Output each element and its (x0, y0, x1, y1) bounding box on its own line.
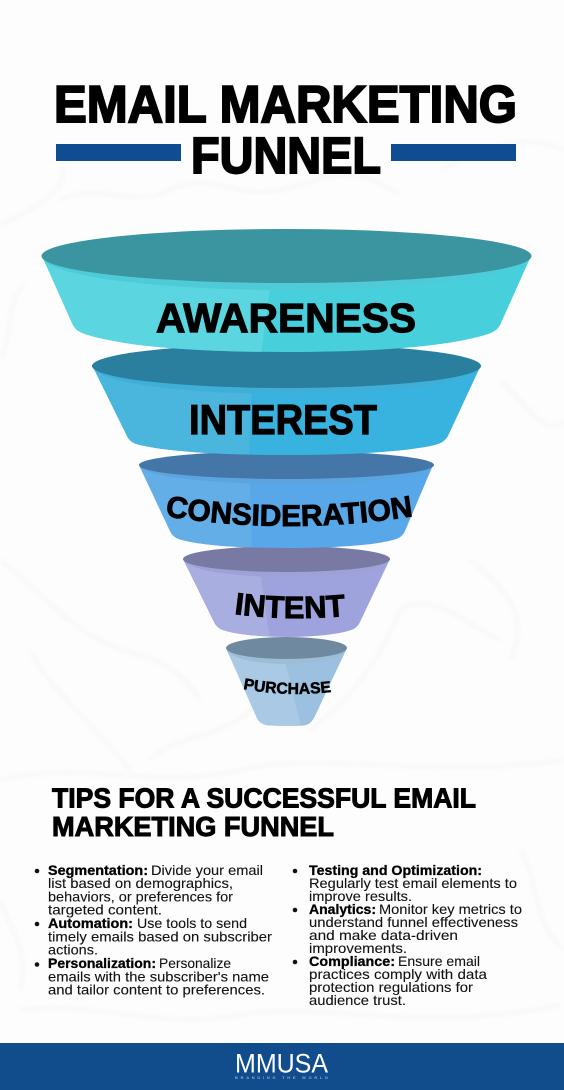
footer logo: BRANDING THE WORLD (235, 1075, 328, 1080)
tip: segmentation: Segmentation: (48, 862, 148, 878)
tip: segmentation: list based on demographics, (48, 875, 233, 891)
title: FUNNEL (191, 127, 381, 184)
tip: analytics: improvements. (309, 940, 407, 956)
funnel tier: intent: INTENT (236, 592, 345, 619)
tip: segmentation: targeted content. (48, 902, 162, 918)
tip: analytics: understand funnel effectiveness (309, 914, 518, 930)
tip: testing and optimization (293, 862, 517, 904)
funnel tier: awareness: AWARENESS (156, 295, 416, 341)
tip: personalization: emails with the subscriber's name (48, 968, 269, 984)
tip: automation: Use tools to send (137, 915, 247, 931)
tip: automation: Automation: (48, 915, 133, 931)
tip: testing and optimization: Regularly test email elements to (309, 875, 517, 891)
tip: analytics: Analytics: (309, 901, 376, 917)
funnel tier: interest: INTEREST (189, 396, 377, 443)
tip: compliance: Ensure email (398, 953, 480, 969)
funnel tier: purchase: PURCHASE (244, 678, 331, 694)
tip: analytics: and make data-driven (309, 927, 458, 943)
title accent bar left (56, 144, 181, 161)
tip: testing and optimization: improve results. (309, 888, 412, 904)
funnel tier: consideration (139, 453, 434, 548)
funnel tier: purchase (226, 637, 347, 726)
tip: analytics (293, 901, 522, 956)
funnel tier: awareness (35, 222, 532, 355)
funnel tier: consideration: CONSIDERATION (167, 496, 412, 526)
tips list: right column (293, 862, 522, 1008)
funnel tier: interest (92, 348, 481, 455)
tip: personalization: Personalization: (48, 955, 156, 971)
tips heading: TIPS FOR A SUCCESSFUL EMAIL (52, 782, 476, 814)
tip: compliance (293, 953, 487, 1008)
tip: segmentation: behaviors, or preferences for (48, 888, 233, 904)
tip: analytics: Monitor key metrics to (379, 901, 522, 917)
title (54, 76, 517, 184)
tip: personalization (35, 955, 269, 998)
footer band (0, 1043, 564, 1090)
funnel (42, 229, 532, 726)
tips heading (52, 782, 476, 842)
tip: compliance: audience trust. (309, 992, 406, 1008)
tips list: left column (35, 862, 272, 998)
title: EMAIL MARKETING (54, 76, 517, 134)
tip: personalization: and tailor content to preferences. (48, 982, 265, 998)
tip: automation: timely emails based on subscriber (48, 928, 272, 944)
tip: personalization: Personalize (159, 955, 231, 971)
tip: automation: actions. (48, 942, 98, 958)
tip: compliance: practices comply with data (309, 966, 487, 982)
tip: segmentation: Divide your email (151, 862, 263, 878)
tip: segmentation (35, 862, 263, 918)
tip: automation (35, 915, 272, 958)
tip: compliance: Compliance: (309, 953, 395, 969)
funnel tier: intent (183, 547, 390, 637)
footer logo: MMUSA (235, 1048, 328, 1078)
tip: compliance: protection regulations for (309, 979, 473, 995)
title accent bar right (391, 144, 516, 161)
tips heading: MARKETING FUNNEL (52, 811, 334, 842)
tip: testing and optimization: Testing and Optimization: (309, 862, 482, 878)
